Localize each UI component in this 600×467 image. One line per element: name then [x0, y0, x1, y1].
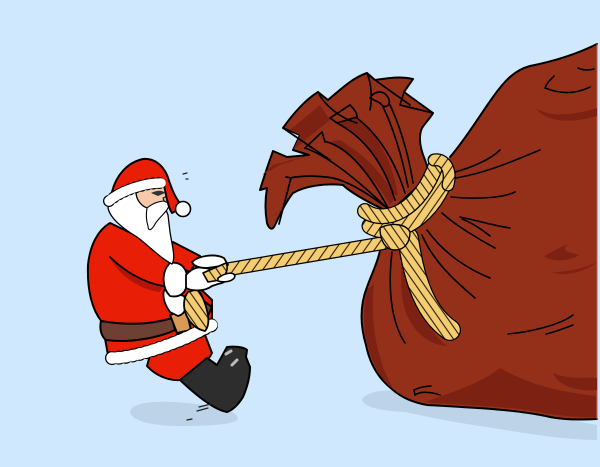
ruffle shading	[262, 105, 398, 205]
hat	[112, 159, 183, 213]
sack right edge	[596, 44, 598, 419]
lower fur	[163, 290, 186, 316]
sack body	[362, 44, 597, 420]
motion marks	[187, 404, 211, 420]
beard	[108, 190, 174, 264]
hat pom-pom	[176, 202, 190, 216]
rope	[212, 160, 450, 330]
sack outline	[362, 44, 597, 420]
arm crease	[110, 257, 163, 286]
coat shading	[110, 257, 163, 292]
rope coil in hand	[184, 289, 208, 331]
far arm	[165, 242, 200, 272]
rope loop: lower	[370, 178, 446, 230]
rope loop: upper	[365, 162, 437, 216]
eye	[151, 191, 165, 196]
glove	[186, 267, 228, 290]
coat	[88, 223, 212, 355]
boot	[180, 347, 250, 412]
belt buckle	[170, 309, 191, 333]
sweat marks	[183, 173, 188, 179]
sack	[362, 44, 597, 420]
rope tail	[408, 238, 450, 330]
face	[136, 183, 170, 208]
cuff: left	[164, 263, 187, 296]
Santa	[88, 159, 250, 420]
sack creases	[390, 68, 594, 395]
nose	[163, 197, 171, 202]
moustache	[146, 201, 169, 230]
cuff: right	[192, 255, 228, 268]
rope in hand	[203, 263, 227, 282]
sack fold marks	[536, 108, 597, 390]
main rope	[212, 243, 384, 272]
belt	[100, 297, 212, 341]
rope knot	[380, 225, 410, 250]
ruffled neck	[260, 73, 433, 229]
thumb	[218, 273, 235, 282]
trouser leg	[147, 335, 212, 380]
sack shading	[364, 250, 596, 417]
coat fur trim	[112, 325, 212, 358]
shadow: Santa	[130, 402, 238, 426]
ruffle fold lines	[279, 73, 433, 224]
rope loop: end	[434, 160, 449, 185]
boot highlights	[226, 351, 237, 365]
shadow: sack	[362, 390, 597, 440]
sack top ruffle	[260, 73, 433, 229]
hat brim	[109, 183, 161, 201]
